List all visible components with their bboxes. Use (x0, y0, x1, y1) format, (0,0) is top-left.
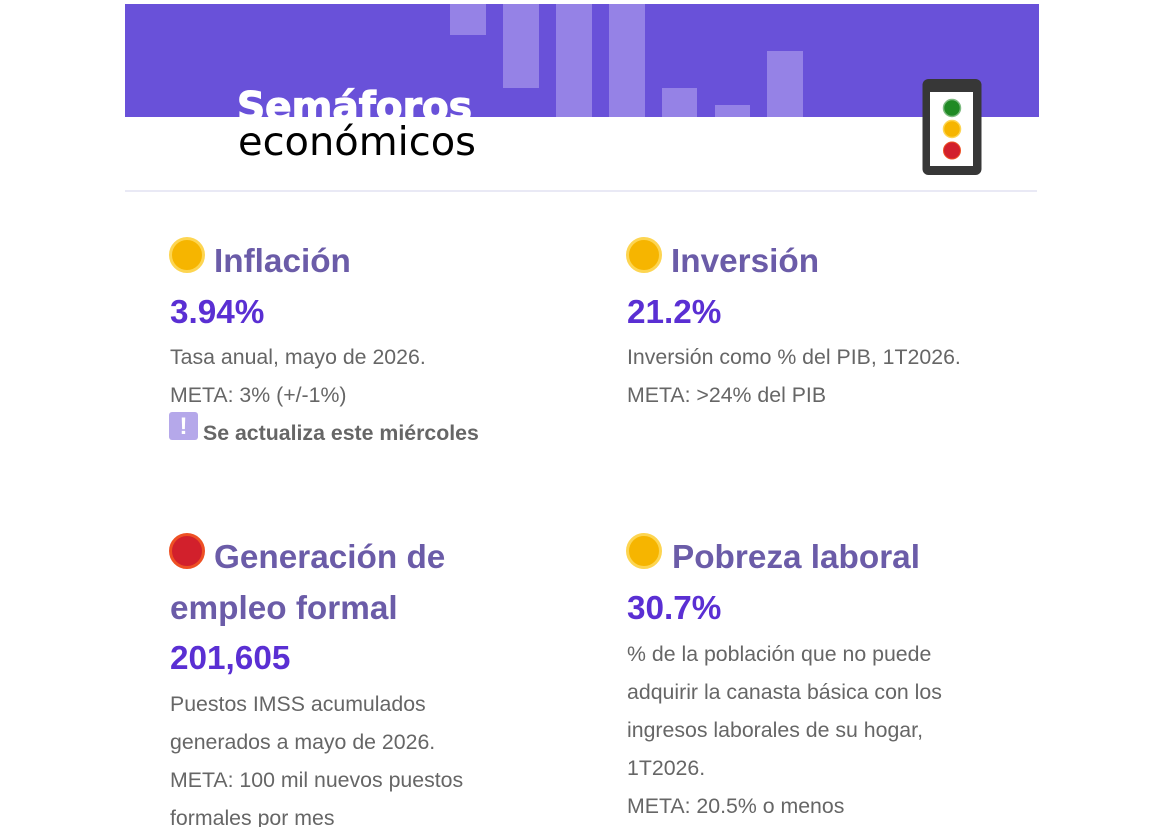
description: META: 20.5% o menos (627, 794, 844, 818)
description: Puestos IMSS acumulados (170, 692, 426, 716)
description (627, 642, 942, 818)
header background with bars (125, 4, 1039, 192)
description: % de la población que no puede (627, 642, 931, 666)
value: 201,605 (170, 640, 290, 677)
description: adquirir la canasta básica con los (627, 680, 942, 704)
icon: yellow status (169, 237, 205, 273)
heading: Inversión (671, 243, 819, 280)
description: META: >24% del PIB (627, 383, 826, 407)
description (170, 345, 426, 407)
icon: yellow status (626, 533, 662, 569)
panel: generación de empleo formal (169, 533, 463, 827)
title: Semáforos (237, 85, 472, 130)
description: ingresos laborales de su hogar, (627, 718, 923, 742)
heading: Generación de (214, 539, 445, 576)
value: 30.7% (627, 590, 721, 627)
description: META: 3% (+/-1%) (170, 383, 347, 407)
header banner (125, 4, 1039, 192)
panel: inflación (169, 237, 479, 445)
description: generados a mayo de 2026. (170, 730, 435, 754)
icon: alert: ! (180, 413, 188, 440)
heading (170, 539, 445, 627)
description: Tasa anual, mayo de 2026. (170, 345, 426, 369)
icon: traffic light (922, 79, 982, 175)
value: 3.94% (170, 294, 264, 331)
icon: alert (169, 412, 198, 440)
heading: Pobreza laboral (672, 539, 920, 576)
panel: inversión (626, 237, 961, 407)
heading: empleo formal (170, 590, 398, 627)
icon: yellow status (626, 237, 662, 273)
description (627, 345, 961, 407)
heading: Inflación (214, 243, 351, 280)
description: 1T2026. (627, 756, 705, 780)
update note: Se actualiza este miércoles (203, 421, 479, 445)
icon: red status (169, 533, 205, 569)
panel: pobreza laboral (626, 533, 942, 818)
description (170, 692, 463, 827)
title: económicos (238, 120, 476, 165)
title (238, 88, 476, 165)
description: META: 100 mil nuevos puestos (170, 768, 463, 792)
description: Inversión como % del PIB, 1T2026. (627, 345, 961, 369)
value: 21.2% (627, 294, 721, 331)
